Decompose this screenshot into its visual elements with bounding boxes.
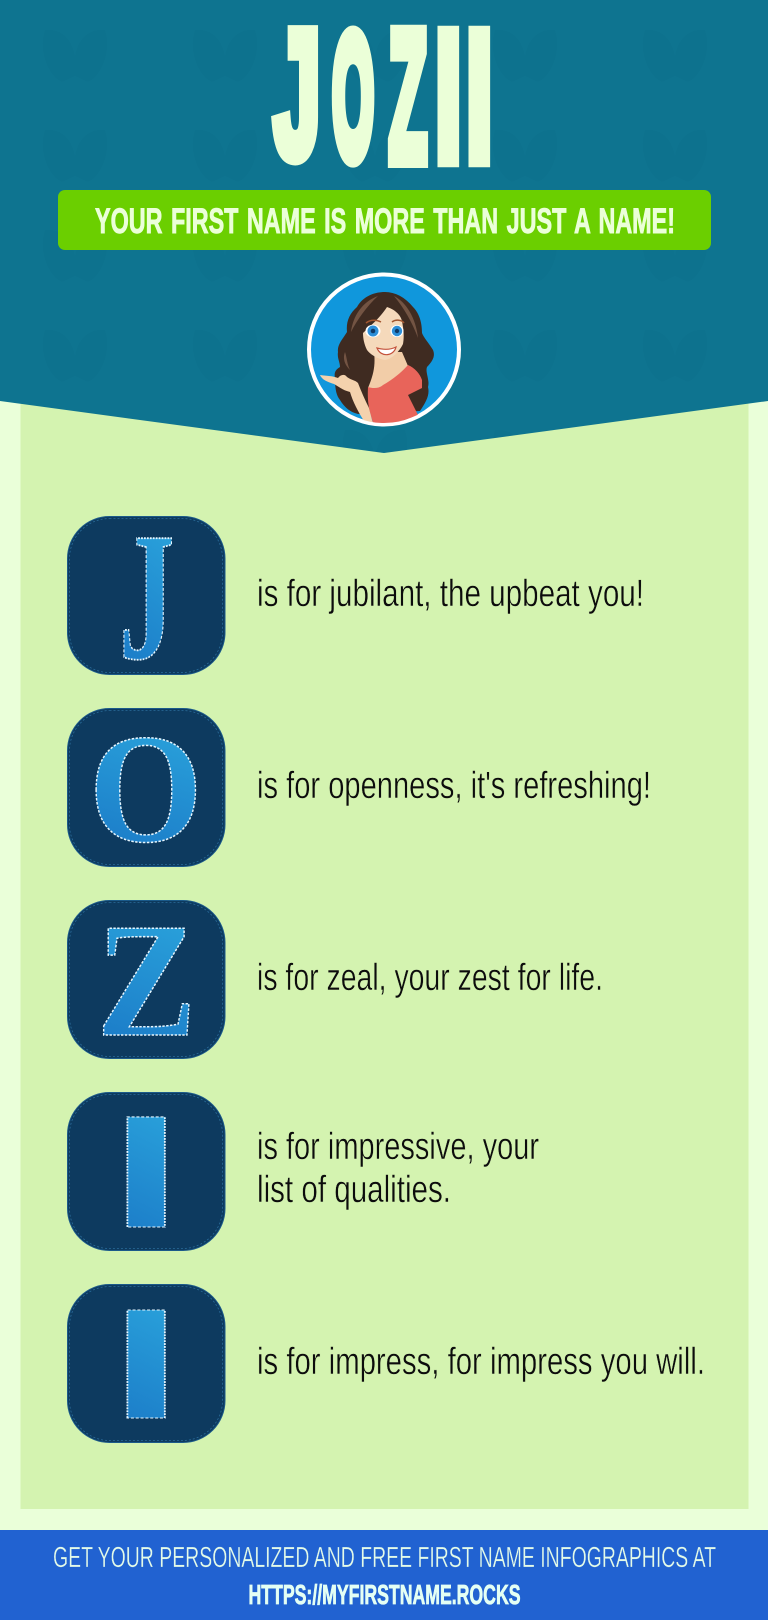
- text I: [257, 1126, 539, 1211]
- text J: is for jubilant, the upbeat you!: [257, 573, 644, 615]
- hair: [335, 292, 434, 414]
- title: [274, 0, 494, 202]
- title: O: [332, 1, 374, 194]
- text O: is for openness, it's refreshing!: [257, 765, 651, 807]
- footer line 2: HTTPS://MYFIRSTNAME.ROCKS: [248, 1579, 520, 1610]
- text Z: is for zeal, your zest for life.: [257, 957, 603, 999]
- tile J: J: [119, 495, 174, 698]
- brows: [366, 320, 404, 323]
- tile I: [68, 1082, 225, 1261]
- eyes: [366, 325, 380, 337]
- row 3: Z: [68, 889, 603, 1070]
- row 5: I: [68, 1276, 705, 1452]
- tile Z: Z: [96, 889, 197, 1070]
- row 1: J: [68, 495, 644, 698]
- mouth: [377, 347, 396, 355]
- banner: [58, 190, 711, 250]
- text I: list of qualities.: [257, 1169, 451, 1211]
- tile I second: [68, 1276, 225, 1452]
- row 2: O: [68, 702, 651, 875]
- text I: is for impressive, your: [257, 1126, 539, 1168]
- avatar: woman portrait: [309, 274, 459, 424]
- title: Z: [389, 0, 427, 200]
- tile J: [68, 495, 225, 698]
- row 4: I: [68, 1082, 539, 1261]
- shirt: [368, 365, 422, 424]
- neck and chest: [368, 352, 408, 390]
- panel: content background: [20, 380, 748, 1509]
- tile I second: I: [110, 1276, 182, 1452]
- footer: [0, 1530, 768, 1620]
- tile O: O: [89, 702, 203, 875]
- header background: [0, 0, 768, 453]
- tile Z: [68, 889, 225, 1070]
- face: [363, 307, 404, 360]
- title: J: [274, 0, 320, 194]
- arm and hand: [320, 375, 373, 424]
- tile I: I: [110, 1082, 182, 1261]
- hair highlights: [344, 296, 418, 370]
